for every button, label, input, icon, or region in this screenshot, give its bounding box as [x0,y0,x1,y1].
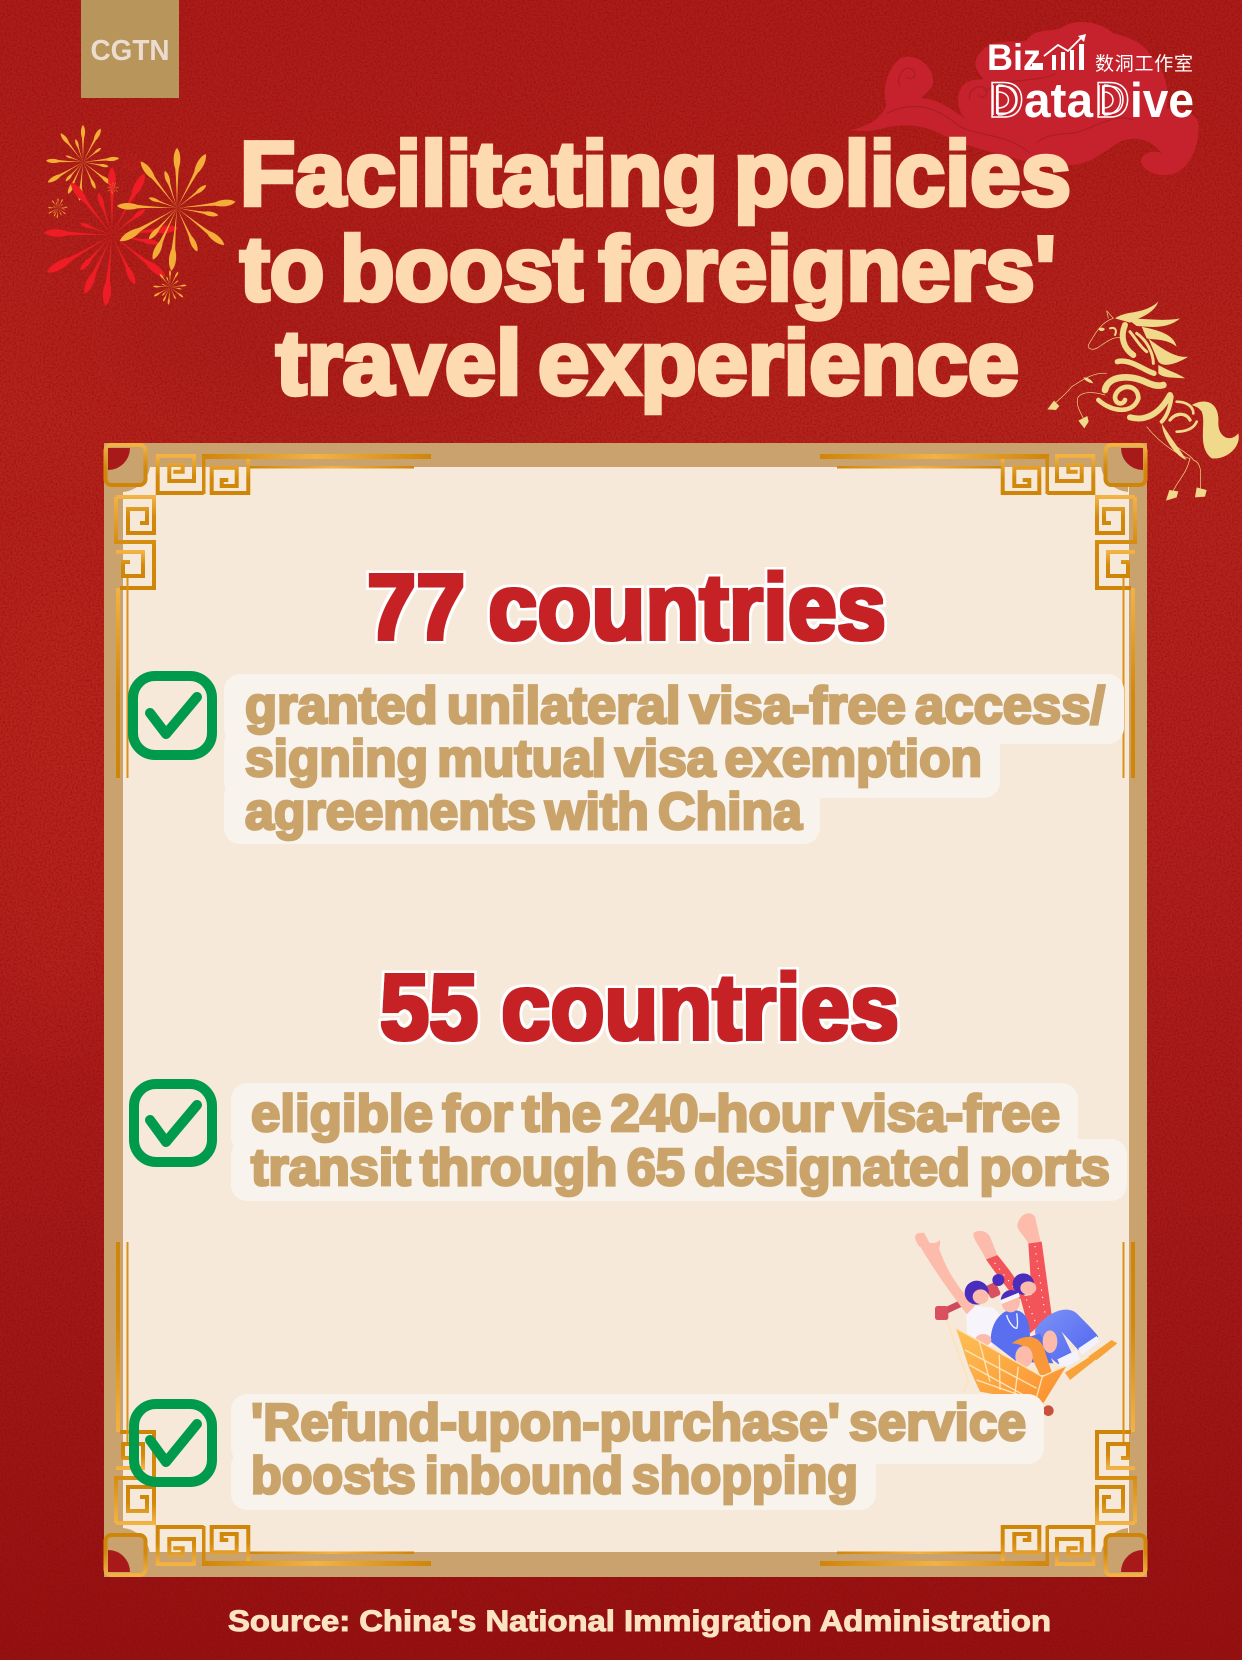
CGTN logo: CGTN [90,35,170,67]
mane [1047,302,1239,501]
check icon 3 [134,1404,212,1482]
arms [919,1243,975,1315]
title: Facilitating policies [240,124,1071,225]
title: to boost foreigners' [240,219,1056,320]
jeans [1035,1310,1098,1364]
highlighted text block 3: 'Refund-upon-purchase' service [251,1394,1026,1452]
corner ornaments [106,445,1146,1575]
heading: 77 countries: 77 countries [367,555,886,659]
decorative cloud behind BizData logo [850,22,1199,175]
highlighted text block 1: signing mutual visa exemption [245,730,982,788]
title [240,124,1071,414]
check icon 2 [134,1084,212,1162]
BizData DataDive logo: Biz [987,37,1041,78]
item 2 [134,1083,1127,1201]
title: travel experience [276,313,1019,414]
highlighted text block 2 [231,1083,1127,1201]
cart handle [940,1287,995,1313]
highlighted text block 1 [224,674,1124,844]
heading: 55 countries: 55 countries [380,955,899,1059]
highlighted text block 2: transit through 65 designated ports [251,1139,1110,1197]
BizData DataDive logo: D [1094,72,1130,128]
highlighted text block 3: boosts inbound shopping [251,1447,858,1505]
info panel frame [104,443,1147,1577]
BizData DataDive logo: ata [1024,74,1094,128]
source: Source: China's National Immigration Administration [228,1605,1051,1638]
woman left [965,1281,989,1305]
highlighted text block 3 [231,1394,1044,1510]
icon: golden horse [1047,302,1239,501]
BizData DataDive logo: 数洞工作室 [1095,53,1193,75]
highlighted text block 2: eligible for the 240-hour visa-free [251,1085,1060,1143]
basket [956,1328,1066,1403]
BizData DataDive logo: ive [1130,74,1194,128]
fireworks [44,125,236,306]
check icon 1 [133,676,212,755]
highlighted text block 1: agreements with China [245,783,803,841]
illustration: friends in shopping cart [915,1213,1117,1417]
woman back [992,1274,1004,1286]
BizData DataDive logo [987,34,1194,128]
highlighted text block 1: granted unilateral visa-free access/ [245,677,1105,735]
BizData DataDive logo: D [988,72,1024,128]
item 3 [134,1394,1044,1510]
man [991,1310,1053,1363]
CGTN logo [81,0,179,98]
icon: rising bar chart [1032,34,1086,70]
item 1 [133,674,1124,844]
